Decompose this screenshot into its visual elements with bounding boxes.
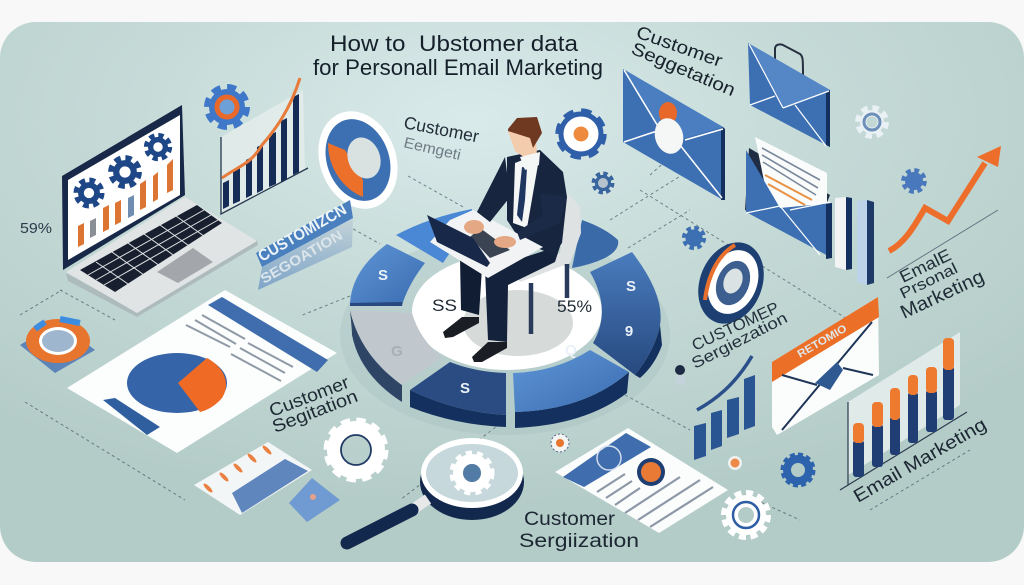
central ring chart: SS [432,296,457,315]
segment symbols [378,267,636,397]
label: customer segregation left: Segitation [269,386,360,437]
segment symbols: S [378,267,388,284]
text block: customer: Customer [402,112,481,146]
label: email marketing: Email Marketing [850,413,990,506]
torso [507,150,567,255]
segment symbols: G [391,343,403,360]
title [313,31,603,80]
label: customer segmentation top: Customer [634,22,725,71]
target icon [687,232,775,334]
label: customer segmentation top: Seggetation [628,38,738,100]
small gear [594,174,612,192]
text block: customer [402,112,481,164]
magnifying glass [347,438,524,543]
report document [555,428,728,533]
label: customer segregation right: CUSTOMEP [690,299,782,355]
icon: laptop with gears [62,105,258,317]
banner: customization segregation: SEGOATION [258,227,345,287]
central ring chart [340,209,670,435]
small white gear [860,110,884,134]
white gear [327,421,385,479]
small report card [194,442,312,515]
segment symbols: S [626,278,636,295]
label: customer segregation left [266,372,360,437]
label: customer segmentation top [628,22,738,100]
central ring chart: 55% [557,297,592,316]
banner: customization segregation: CUSTOMIZCN [256,201,350,265]
person with laptop [427,117,581,362]
segment symbols: S [460,380,470,397]
label: customer sergiization: Customer [524,509,616,530]
tray and laptop [430,210,543,278]
arms [477,157,510,222]
segment tops [396,209,476,263]
label: 59%: 59% [20,220,52,237]
stacked bar chart [840,332,967,490]
touchpad [157,248,213,283]
blue gear [782,454,814,486]
report with pie chart [67,290,337,453]
title: How to Ubstomer data [330,31,579,56]
label: email personal marketing: Prsonal [897,260,960,303]
icon: open envelope with letter [745,137,832,259]
icon: envelope large [623,69,725,200]
3D bars [835,197,874,285]
hands [464,220,484,234]
label: email personal marketing [896,245,988,324]
icon: blue gear [209,89,245,125]
title: for Personall Email Marketing [313,55,603,80]
small envelope [289,478,340,522]
segment symbols: Q [565,342,577,359]
legs [460,258,482,315]
donut chart [305,100,411,220]
label: email personal marketing: Marketing [897,266,988,324]
bars on screen [78,159,173,247]
banner: customization segregation [256,200,353,290]
keyboard [80,205,222,292]
arrow chart [887,146,1001,278]
chair [517,192,581,282]
small blue gear [904,172,924,190]
small blue gear [685,229,703,247]
bar chart with trend [694,356,755,460]
label: customer sergiization [519,509,639,552]
label: email personal marketing: EmalE [896,245,954,287]
label: customer segregation right [689,299,790,373]
white and blue gear [724,493,768,537]
growth chart [221,78,308,215]
label: customer sergiization: Sergiization [519,531,639,552]
label: customer segregation left: Customer [266,372,352,421]
small orange dot [728,456,742,470]
small pin [675,365,685,385]
segment sides [350,310,402,402]
label: customer segregation right: Sergiezation [689,310,790,373]
gauge icon: gear with orange dot [561,114,601,154]
shoes [443,317,479,338]
segment symbols: 9 [625,323,633,340]
head [508,126,537,160]
dashed connector lines [20,130,970,520]
text block: customer: Eemgeti [402,134,462,164]
icon: target donut tile [20,319,95,373]
email card: RETOMIO [796,322,850,361]
small orange gear [551,434,569,452]
email card [772,297,879,435]
ring centre [412,254,602,370]
icon: envelope with handle [748,43,830,147]
